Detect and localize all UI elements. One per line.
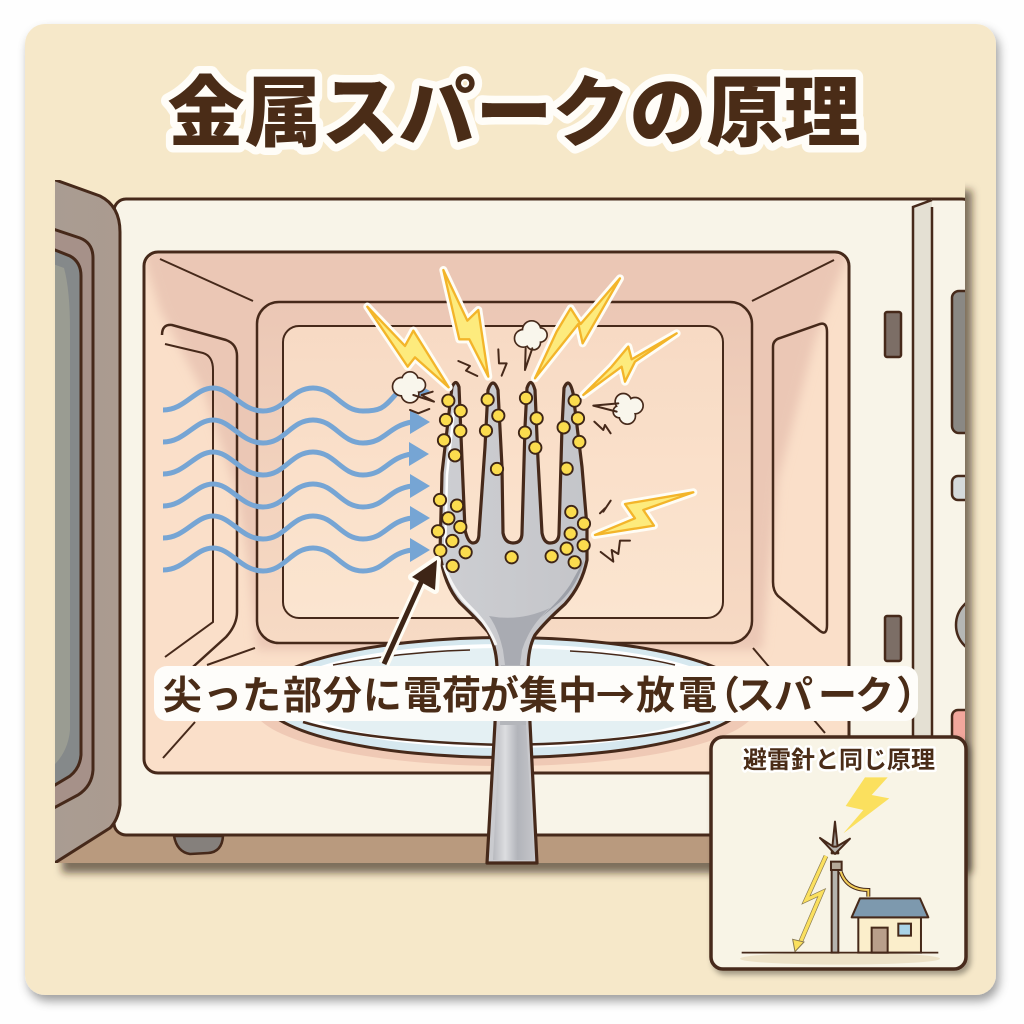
door [50,178,120,866]
caption label: 尖った部分に電荷が集中→放電（スパーク） [163,665,935,721]
oven cavity [140,245,855,773]
panel: microwave [50,178,1014,866]
charge dots [432,392,590,572]
left wall panel [162,325,237,695]
pointer arrow to fork tip [384,560,437,664]
inset illustration [740,777,940,965]
microwaves: wave arrows [163,380,430,571]
microwave foot [174,836,223,854]
smoke puffs [393,322,642,423]
fork [440,382,587,863]
inset heading: 避雷針と同じ原理 [743,740,935,775]
sparks: lightning bolts [367,270,693,535]
title: 金属スパークの原理 [168,71,860,157]
door latch slots [885,312,901,661]
plate [253,638,757,766]
right wall panel [773,324,827,633]
side controls [912,199,965,741]
panel: lightning rod inset [711,737,966,969]
spark squiggles [410,349,630,562]
